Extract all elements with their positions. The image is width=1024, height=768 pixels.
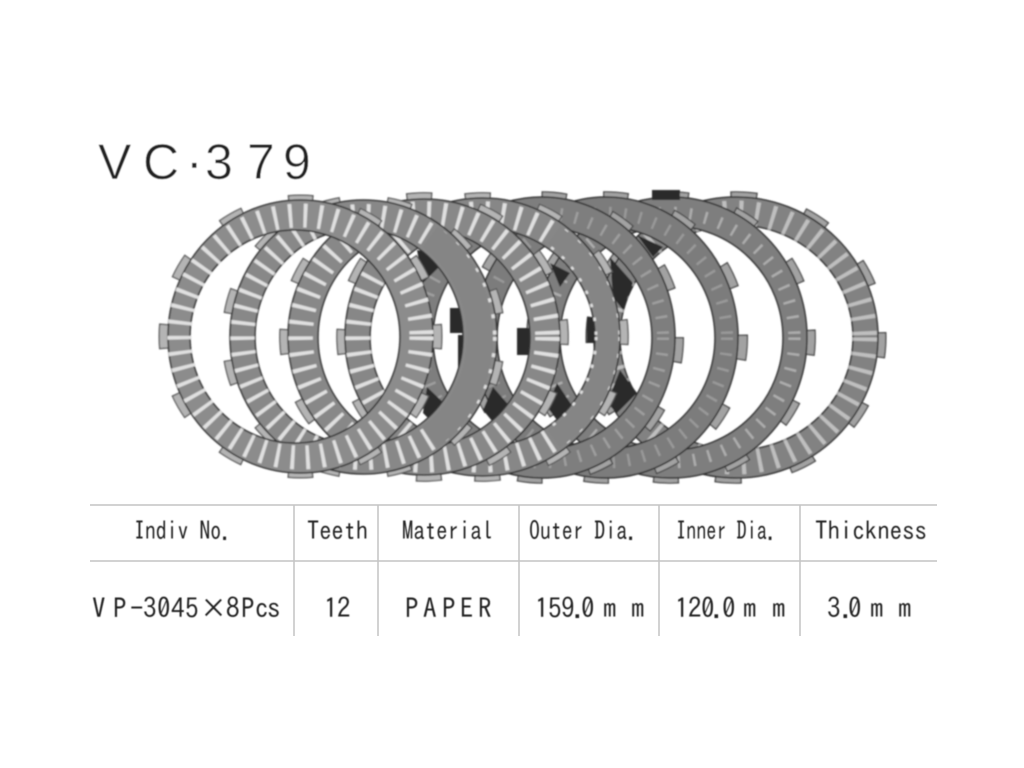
table header row: Thickness [815, 518, 927, 544]
table header row: Teeth [307, 518, 368, 544]
clutch plate 7 [528, 193, 814, 482]
clutch plate 6 [461, 188, 751, 487]
table header row [134, 518, 927, 544]
table value row: PAPER [405, 595, 492, 622]
clutch plate 8 [584, 190, 888, 485]
clutch plate 2 [197, 170, 530, 504]
title: VC·379 [98, 134, 311, 190]
table header row: Outer Dia. [529, 518, 638, 544]
clutch plate 3 [281, 194, 567, 480]
table header row: Material [402, 518, 493, 544]
table grid [90, 505, 937, 636]
clutch plate 4 [338, 194, 627, 480]
clutch plates illustration [164, 170, 888, 504]
table header row: Indiv No. [134, 518, 232, 544]
table header row: Inner Dia. [676, 518, 777, 544]
clutch plate 5 [395, 186, 689, 489]
table value row: 159.0mm [535, 595, 644, 622]
dark overlap patches [417, 190, 680, 427]
table value row: 12 [324, 595, 350, 622]
table value row [92, 595, 912, 622]
table value row: 3.0mm [827, 595, 912, 622]
table value row: VP-3045×8Pcs [92, 595, 280, 622]
specification table [90, 505, 937, 636]
table value row: 120.0mm [675, 595, 786, 622]
clutch plate 1 [164, 200, 436, 473]
